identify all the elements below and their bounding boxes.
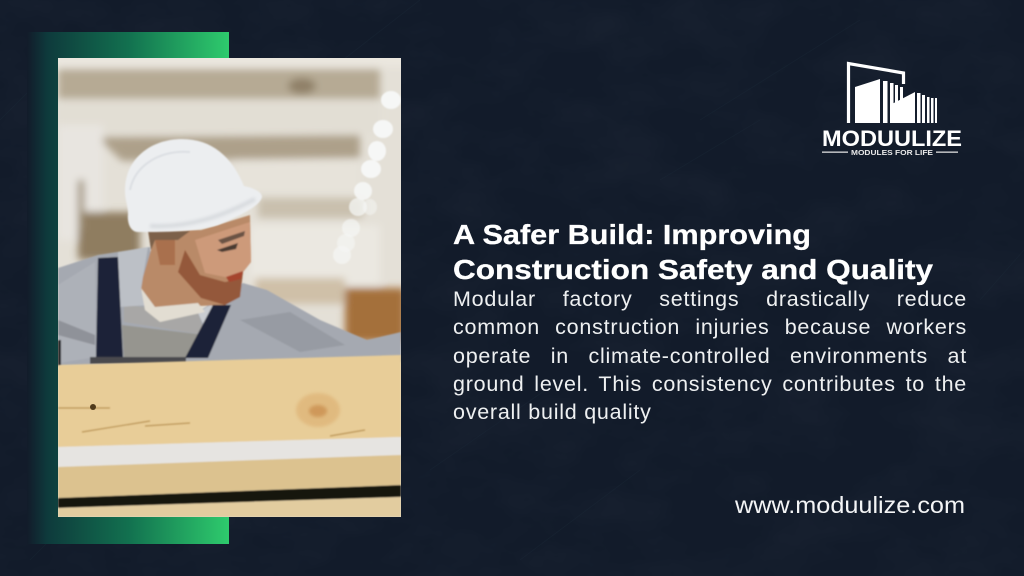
neck and face [141, 215, 251, 307]
bokeh lights [333, 91, 401, 264]
timber [58, 355, 401, 517]
hard hat [125, 139, 262, 232]
website url: www.moduulize.com [734, 492, 965, 518]
heading: Construction Safety and Quality [453, 254, 933, 285]
logo buildings [855, 79, 937, 123]
body paragraph: ground level. This consistency contributes to the [453, 372, 967, 396]
worker shirt [58, 215, 401, 366]
suspenders [96, 257, 123, 357]
heading: A Safer Build: Improving [453, 219, 811, 250]
body paragraph: common construction injuries because workers [453, 315, 967, 339]
logo tagline: MODULES FOR LIFE [851, 148, 933, 157]
logo frame outline [848, 64, 904, 123]
logo wordmark: MODUULIZE [822, 126, 962, 151]
body paragraph: Modular factory settings drastically reduce [453, 287, 967, 311]
body paragraph: overall build quality [453, 400, 652, 424]
photo: construction worker with white hard hat and timber [58, 58, 401, 517]
body paragraph: operate in climate-controlled environments at [453, 344, 967, 368]
